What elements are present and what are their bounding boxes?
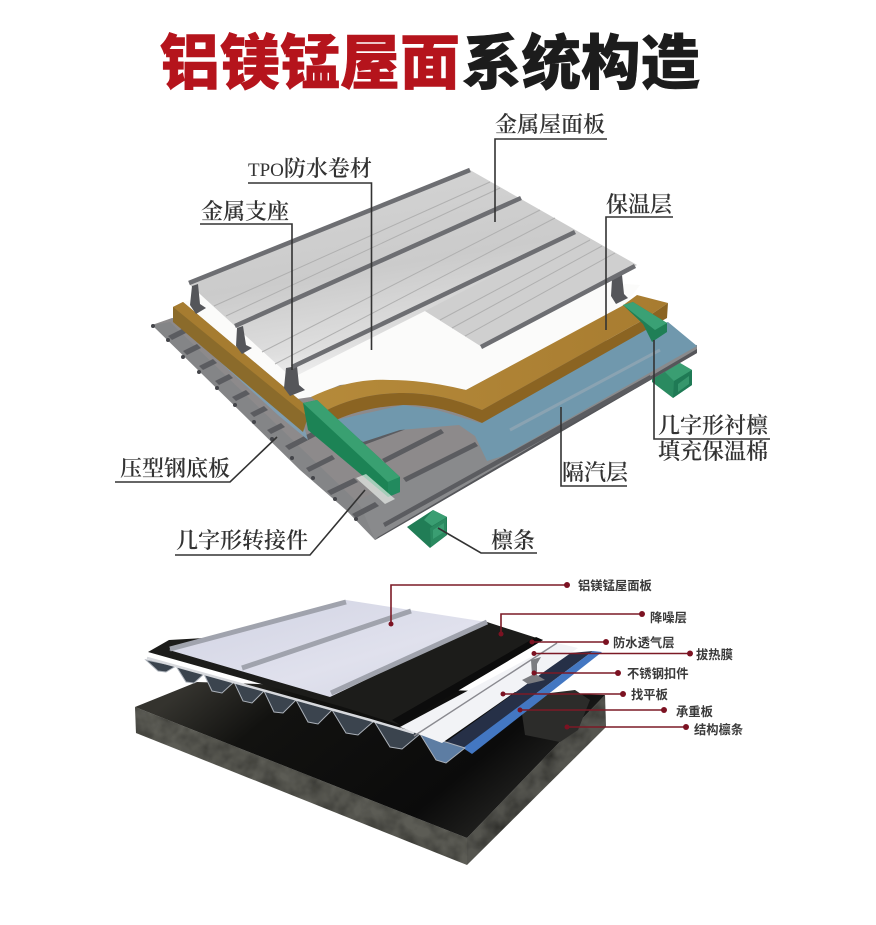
label: hat-shaped lining purlin and filled insulation wool: 填充保温棉 <box>658 439 768 464</box>
insulation layer <box>173 295 668 432</box>
label: TPO waterproof membrane <box>248 156 372 350</box>
vapour barrier layer <box>172 318 697 461</box>
purlin: bottom <box>407 510 447 548</box>
title: 系统构造 <box>462 30 700 97</box>
label: profiled steel base plate: 压型钢底板 <box>120 456 230 481</box>
callout: noise-reduction layer <box>498 610 687 636</box>
black noise-reduction layer <box>148 622 543 725</box>
panel ribs <box>170 602 487 693</box>
bottom roof diagram <box>135 600 606 865</box>
corrugated steel base panel <box>151 318 697 540</box>
callout: structural purlin: 结构檩条 <box>694 722 743 737</box>
stainless fastener <box>522 657 545 684</box>
callout: structural purlin <box>564 722 743 737</box>
white levelling plate <box>400 643 578 743</box>
left edge teeth <box>151 324 358 521</box>
label: vapour barrier <box>561 407 629 486</box>
trapezoid ribs at left edge <box>168 329 652 527</box>
callout: heat-shield film <box>532 647 733 662</box>
label: insulation layer <box>606 192 673 330</box>
white edge line <box>147 658 414 733</box>
callout: levelling plate: 找平板 <box>631 687 669 702</box>
callout: noise-reduction layer: 降噪层 <box>650 610 687 625</box>
blue bearing plate edge <box>463 651 602 754</box>
top roof diagram <box>151 170 697 548</box>
label: purlin: 檩条 <box>491 528 535 553</box>
label: metal roof panel <box>495 112 607 222</box>
label: insulation layer: 保温层 <box>606 192 673 217</box>
callout: bearing plate: 承重板 <box>676 704 714 719</box>
label: TPO waterproof membrane: TPO防水卷材 <box>248 156 372 181</box>
label: hat-shaped adapter <box>175 490 365 555</box>
callout: aluminium-magnesium-manganese panel: 铝镁锰屋面板 <box>578 578 652 593</box>
callout: heat-shield film: 拔热膜 <box>696 647 733 662</box>
purlin: right <box>652 363 692 398</box>
label: profiled steel base plate <box>115 437 277 482</box>
label: purlin <box>438 528 537 553</box>
top aluminium-magnesium-manganese panel <box>169 600 487 697</box>
callout: bearing plate <box>518 704 714 719</box>
structural purlin <box>520 690 590 742</box>
callout: waterproof breathable layer: 防水透气层 <box>613 635 674 650</box>
label: metal roof panel: 金属屋面板 <box>495 112 605 137</box>
callout: stainless steel clip: 不锈钢扣件 <box>627 666 688 681</box>
label: metal support: 金属支座 <box>201 199 289 224</box>
callout: waterproof breathable layer <box>530 635 674 650</box>
concrete slab <box>135 682 606 865</box>
callout: levelling plate <box>500 687 669 702</box>
callout: stainless steel clip <box>532 666 688 681</box>
title <box>160 30 700 97</box>
label: hat-shaped lining purlin and filled insulation wool <box>654 340 770 464</box>
green transfer piece: left <box>303 400 400 504</box>
metal supports and ribs <box>189 170 635 396</box>
label: vapour barrier: 隔汽层 <box>562 460 629 485</box>
title: 铝镁锰屋面 <box>160 30 460 97</box>
label: metal support <box>200 199 292 370</box>
callout: aluminium-magnesium-manganese panel <box>388 578 652 626</box>
corrugated bearing plate <box>146 651 602 763</box>
label: hat-shaped adapter: 几字形转接件 <box>176 528 308 553</box>
corrugation troughs <box>146 660 465 763</box>
metal roof panel <box>190 170 637 378</box>
panel: white TPO membrane <box>180 260 640 400</box>
label: hat-shaped lining purlin and filled insulation wool: 几字形衬檩 <box>658 413 769 438</box>
green lining purlin: right <box>623 302 667 342</box>
